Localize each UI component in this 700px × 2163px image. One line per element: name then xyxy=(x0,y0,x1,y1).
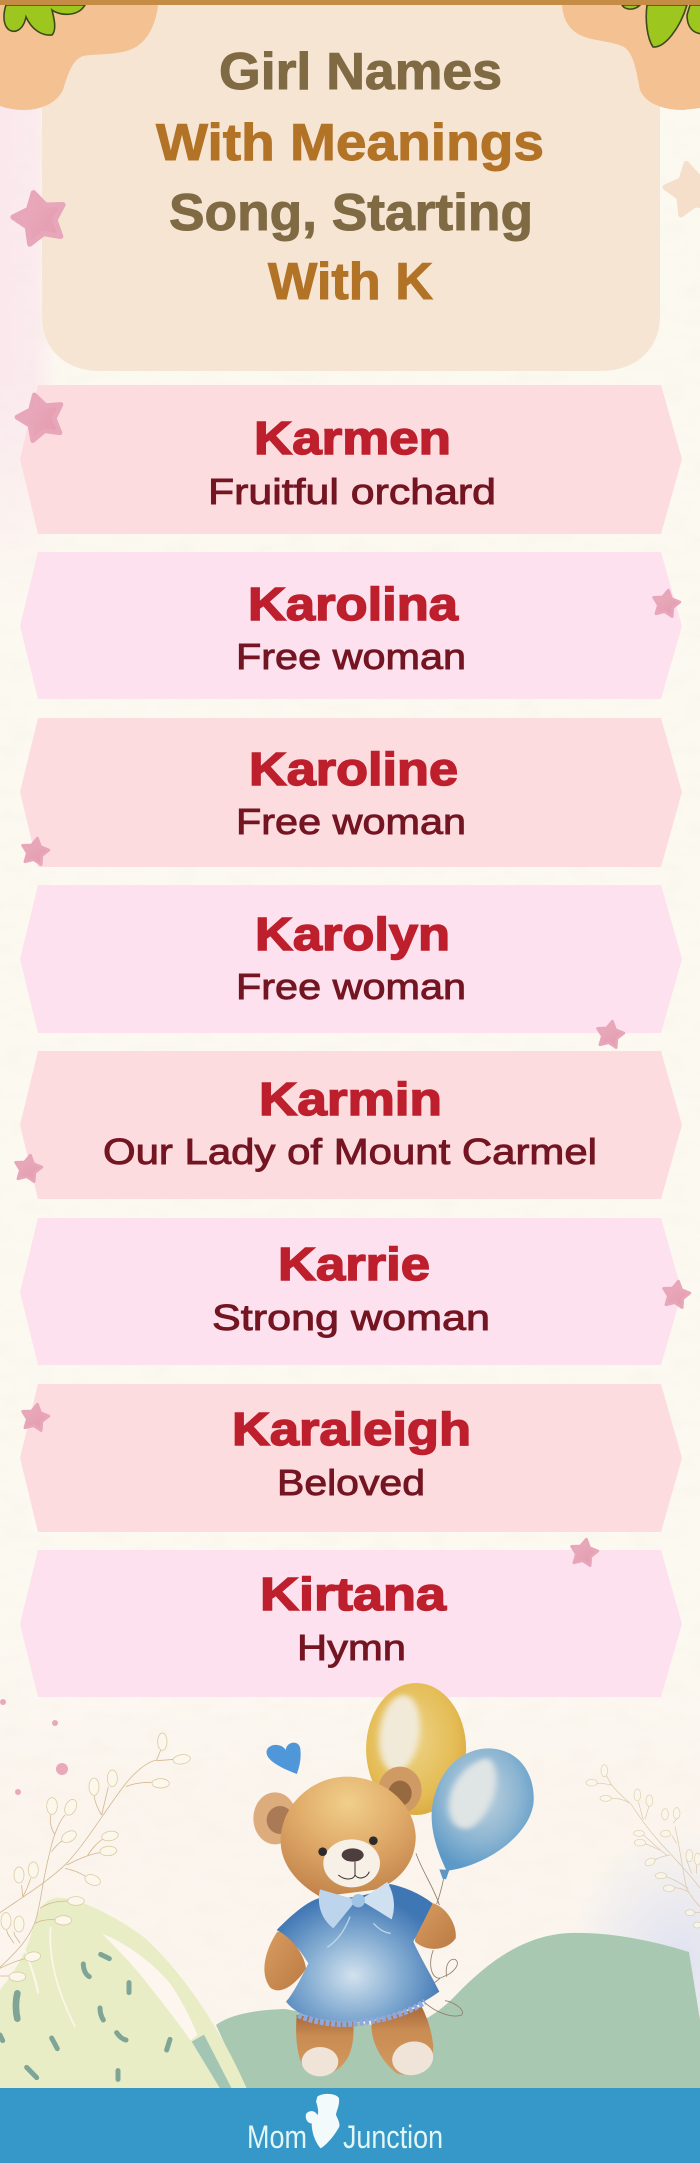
logo: MomJunction: Junction xyxy=(343,2119,443,2155)
top-right peach blob xyxy=(562,5,700,110)
icon: blue heart xyxy=(267,1743,301,1774)
left branch xyxy=(0,1733,191,1981)
feet xyxy=(302,2038,436,2079)
row: Karoline xyxy=(20,718,682,867)
row: Karmen: Fruitful orchard xyxy=(208,471,496,512)
top-left peach blob xyxy=(0,5,158,110)
row: Kirtana: Kirtana xyxy=(260,1568,447,1620)
title: Girl Names xyxy=(219,43,502,101)
icon: mother and child silhouette xyxy=(306,2094,339,2148)
balloon strings xyxy=(416,1853,463,2016)
row: Kirtana xyxy=(20,1550,682,1697)
row: Karolyn: Karolyn xyxy=(255,908,450,960)
title: With Meanings xyxy=(156,114,544,172)
green hill right xyxy=(216,1933,700,2088)
pale green hill left xyxy=(0,1898,247,2088)
row: Karolina: Free woman xyxy=(236,636,466,677)
row: Karoline: Free woman xyxy=(236,801,466,842)
icon: blue balloon xyxy=(432,1748,534,1871)
illustration: teddy bear xyxy=(253,1767,463,2079)
row: Karmin: Karmin xyxy=(259,1073,442,1125)
left leg xyxy=(296,2015,354,2075)
ears xyxy=(253,1767,422,1844)
icon: yellow balloon xyxy=(366,1683,466,1815)
right arm xyxy=(415,1903,456,1949)
row: Karoline: Karoline xyxy=(249,743,458,795)
row: Karmin: Our Lady of Mount Carmel xyxy=(103,1131,597,1172)
row: Kirtana: Hymn xyxy=(297,1627,406,1668)
bow xyxy=(319,1882,394,1928)
logo: MomJunction xyxy=(247,2094,443,2155)
title panel xyxy=(42,5,660,371)
decorative pink dots xyxy=(0,1699,68,1795)
balloon knot xyxy=(439,1869,449,1879)
row: Karaleigh: Beloved xyxy=(277,1462,425,1503)
stars scattered xyxy=(9,158,700,1566)
balloons and heart xyxy=(267,1683,534,1871)
row: Karaleigh: Karaleigh xyxy=(232,1403,471,1455)
row: Karolyn xyxy=(20,885,682,1033)
title: Song, Starting xyxy=(169,184,533,242)
row: Karrie: Karrie xyxy=(278,1238,430,1290)
row: Karrie xyxy=(20,1218,682,1365)
left arm xyxy=(264,1932,306,1990)
row: Karolyn: Free woman xyxy=(236,966,466,1007)
row: Karmen: Karmen xyxy=(254,412,451,464)
row: Karrie: Strong woman xyxy=(212,1297,490,1338)
title: With K xyxy=(268,253,433,311)
icon: green leaves top-right xyxy=(622,5,700,47)
row: Karolina xyxy=(20,552,682,699)
row: Karmin xyxy=(20,1051,682,1199)
footer band xyxy=(0,2088,700,2163)
right leg xyxy=(371,2007,433,2075)
row: Karaleigh xyxy=(20,1384,682,1532)
title xyxy=(156,43,544,311)
bear head xyxy=(281,1777,416,1897)
icon: green leaves top-left xyxy=(4,5,85,35)
bear face xyxy=(318,1836,380,1887)
row: Karmen xyxy=(20,385,682,534)
right branch xyxy=(586,1765,700,1928)
logo: MomJunction: Mom xyxy=(247,2119,307,2155)
top stripe xyxy=(0,0,700,5)
dress xyxy=(277,1884,439,2024)
row: Karolina: Karolina xyxy=(248,578,459,630)
